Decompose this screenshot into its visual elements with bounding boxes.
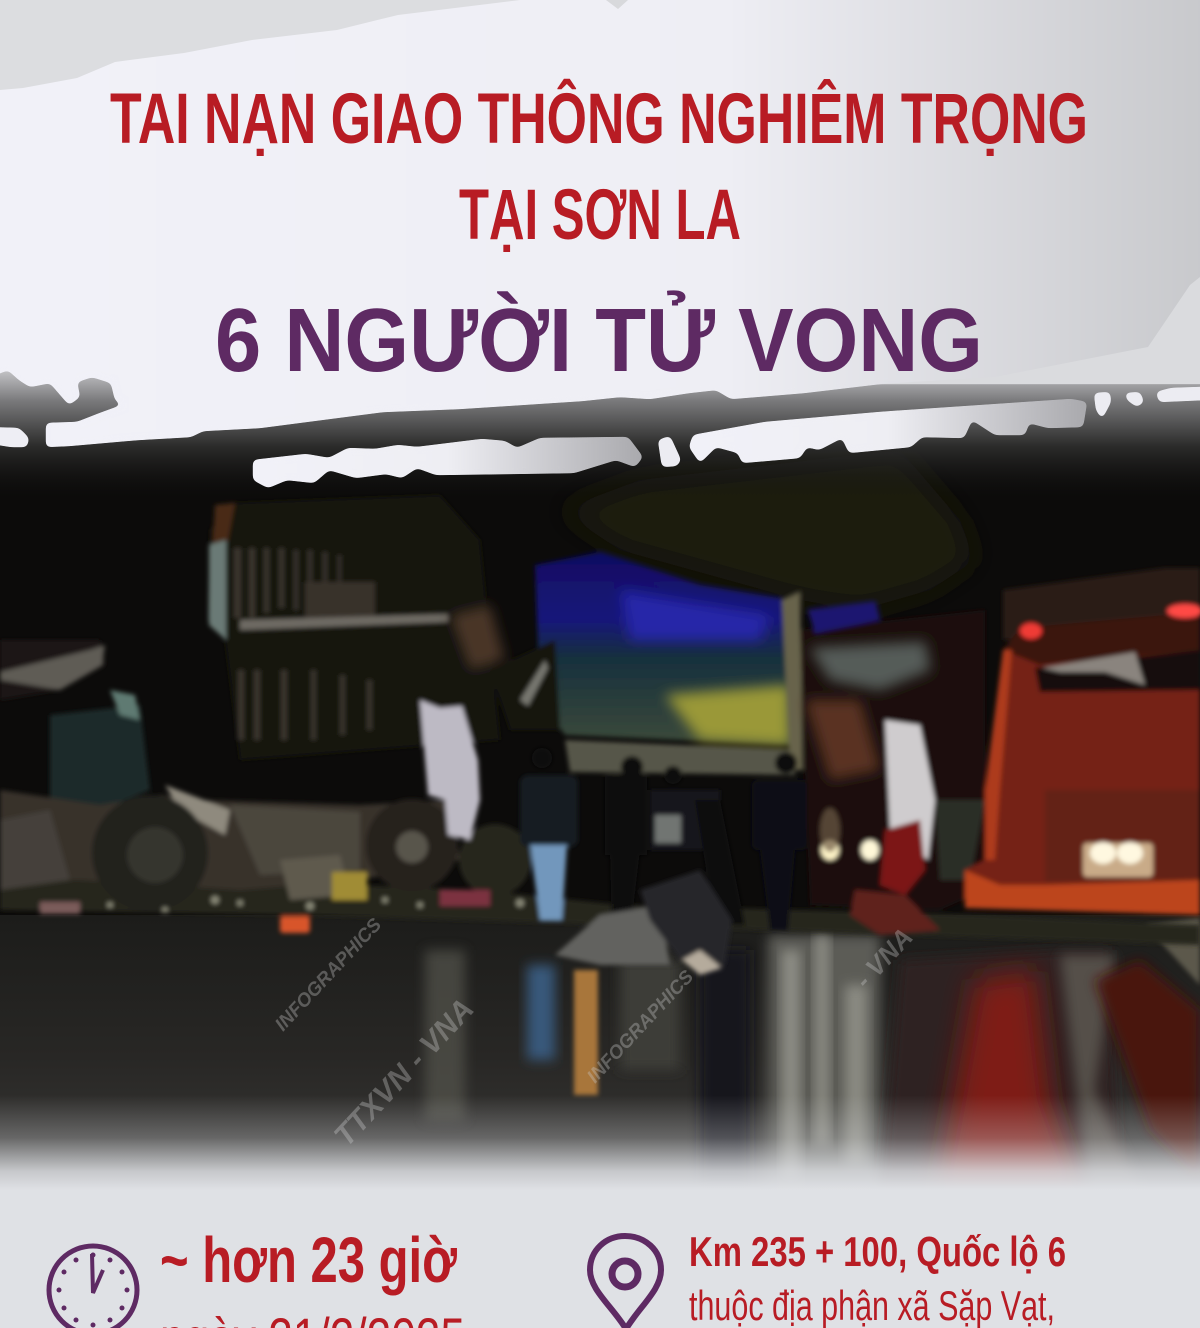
front wheels: [92, 795, 531, 911]
info panel: [49, 1224, 1066, 1328]
photo watermark: [271, 914, 919, 1153]
top fade of photo: [0, 368, 1200, 498]
photo watermark: - VNA: [848, 922, 919, 994]
debris items: [40, 872, 524, 933]
photo watermark: TTXVN - VNA: [328, 993, 481, 1153]
photo watermark: INFOGRAPHICS: [583, 966, 698, 1087]
photo watermark: INFOGRAPHICS: [271, 914, 386, 1035]
torn paper header: [0, 0, 1200, 447]
notch top: [606, 0, 628, 9]
red coach: [965, 568, 1200, 915]
truck container with slats: [208, 495, 505, 760]
icon: location pin: [590, 1236, 661, 1328]
title: [110, 79, 1088, 255]
wrecked truck cab: [0, 640, 460, 900]
people at the scene: [520, 748, 807, 935]
bottom fade of photo: [0, 1095, 1200, 1190]
hanging white cloth: [420, 700, 480, 840]
blue tarp trailer: [490, 552, 803, 775]
headline: deaths: 6 NGƯỜI TỬ VONG: [215, 289, 983, 391]
time heading: ~ hơn 23 giờ: [160, 1224, 457, 1296]
torn paper strips over photo: [0, 386, 1200, 488]
road surface: [0, 915, 1200, 1200]
icon: clock: [49, 1246, 137, 1328]
rubble along road edge: [0, 860, 1200, 945]
location heading: Km 235 + 100, Quốc lộ 6: [689, 1228, 1066, 1275]
tree canopy: [560, 450, 975, 610]
grey torn corner top left: [0, 0, 520, 90]
grey torn corner bottom right: [880, 277, 1200, 384]
photo: night crash scene: [0, 385, 1200, 1200]
title line 2: TẠI SƠN LA: [459, 176, 741, 255]
middle wrecked coach: [800, 602, 985, 935]
location detail: thuộc địa phận xã Sặp Vạt,: [689, 1282, 1055, 1328]
covered bodies on the road: [555, 870, 732, 975]
